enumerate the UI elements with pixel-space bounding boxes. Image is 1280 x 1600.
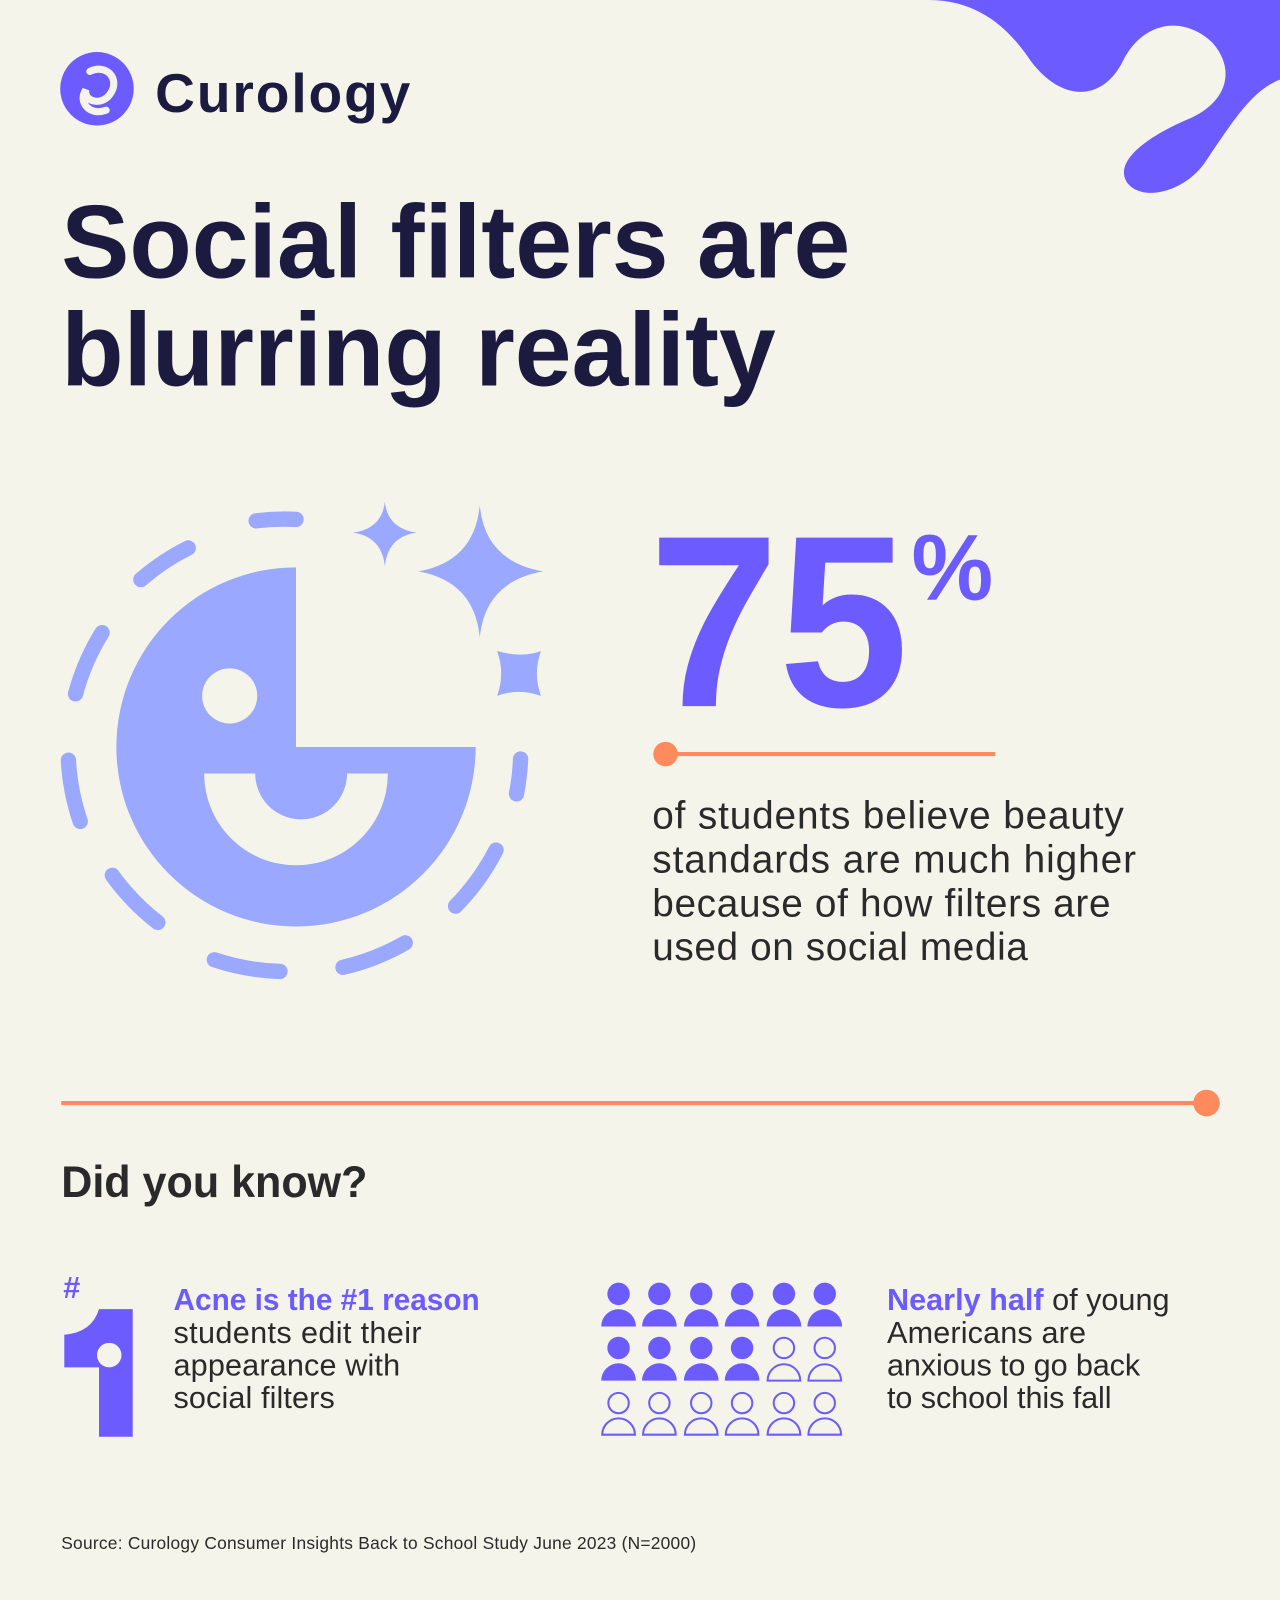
source note: Source: Curology Consumer Insights Back to School Study June 2023 (N=2000) bbox=[61, 1533, 696, 1553]
stat: 75%: % bbox=[912, 515, 993, 620]
fact 2 text: Nearly half of young bbox=[887, 1283, 1170, 1317]
logo bbox=[60, 52, 411, 126]
logo text: Curology bbox=[155, 62, 411, 124]
fact 2 text: Americans are bbox=[887, 1316, 1086, 1350]
title: Social filters are bbox=[61, 185, 850, 301]
stat description: because of how filters are bbox=[652, 882, 1111, 925]
fact 1 text bbox=[174, 1283, 480, 1415]
stat description: of students believe beauty bbox=[652, 795, 1124, 838]
icon: #1 bbox=[63, 1271, 133, 1437]
fact 1 text: students edit their bbox=[174, 1316, 422, 1350]
fact 2 text bbox=[887, 1283, 1170, 1415]
fact 1 text: Acne is the #1 reason bbox=[174, 1283, 480, 1317]
heading: did you know: Did you know? bbox=[61, 1156, 367, 1207]
illustration: smiling face with dashed ring and sparkles bbox=[68, 502, 543, 971]
fact 2 text: to school this fall bbox=[887, 1381, 1112, 1415]
fact 1 text: social filters bbox=[174, 1381, 335, 1415]
decorative blob top right bbox=[929, 0, 1280, 193]
icon grid: people bbox=[601, 1283, 842, 1435]
stat description: standards are much higher bbox=[652, 838, 1136, 881]
stat: 75%: 75 bbox=[649, 484, 908, 758]
title bbox=[61, 185, 850, 409]
title: blurring reality bbox=[61, 293, 776, 409]
long orange divider bbox=[61, 1090, 1220, 1116]
stat description: used on social media bbox=[652, 926, 1028, 969]
fact 1 text: appearance with bbox=[174, 1349, 400, 1383]
stat description bbox=[652, 795, 1136, 969]
icon: logo mark bbox=[60, 52, 134, 126]
fact 2 text: anxious to go back bbox=[887, 1349, 1141, 1383]
icon: #1: # bbox=[63, 1271, 80, 1305]
short orange line bbox=[653, 742, 995, 766]
